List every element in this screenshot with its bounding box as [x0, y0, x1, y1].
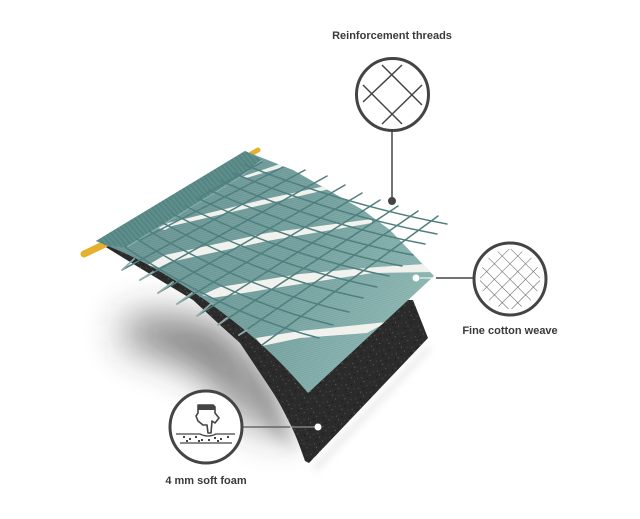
yellow rod: [84, 150, 258, 254]
foam layer: [104, 246, 428, 463]
callout: soft foam: [165, 391, 322, 487]
leader line: [388, 131, 396, 205]
icon: reinforcement threads: [356, 58, 428, 130]
thread stubs over foam: [122, 259, 247, 335]
label: reinforcement threads: Reinforcement threads: [332, 30, 452, 42]
icon: finger pressing foam: [170, 391, 242, 463]
reinforcement threads: [122, 162, 447, 345]
leader line: [243, 424, 322, 430]
icon: weave: [474, 243, 546, 315]
callout: fine cotton weave: [412, 243, 558, 337]
callout: reinforcement threads: [332, 30, 452, 205]
fine cotton weave sheet: [96, 151, 434, 393]
label: weave: Fine cotton weave: [462, 325, 558, 337]
white gaps in weave: [148, 160, 434, 346]
cast shadow: [125, 318, 431, 471]
label: foam: 4 mm soft foam: [165, 475, 247, 487]
folded hem: [96, 151, 262, 247]
leader line: [412, 274, 473, 282]
